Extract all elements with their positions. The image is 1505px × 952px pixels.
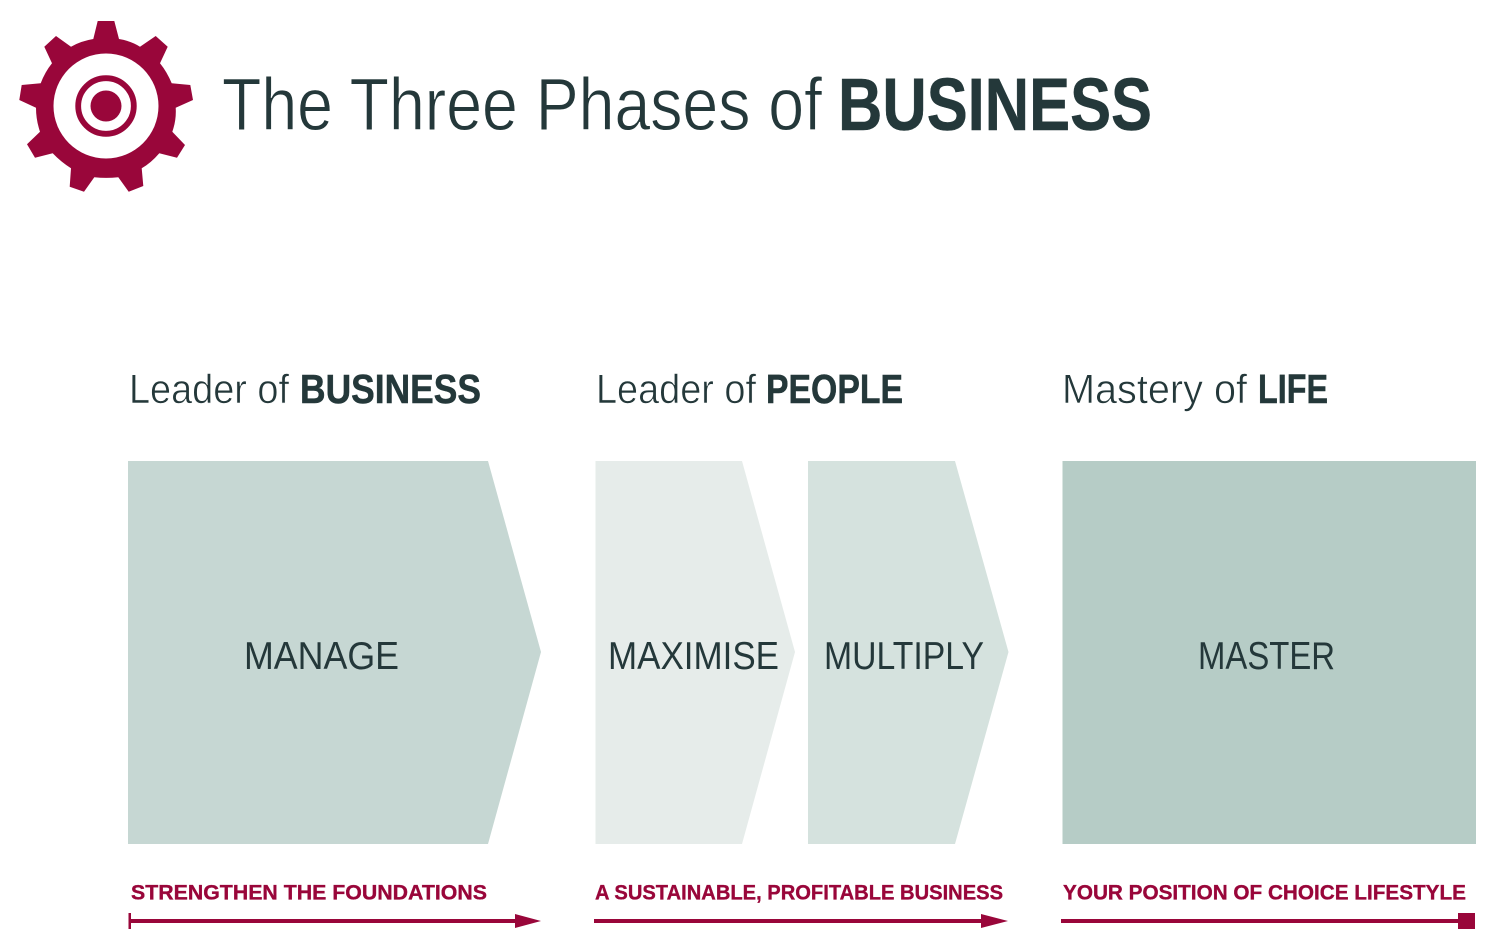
panel: multiply: MULTIPLY: [824, 635, 984, 678]
panel: manage: [128, 461, 541, 844]
caption: a sustainable, profitable business: A SUSTAINABLE, PROFITABLE BUSINESS: [595, 882, 1003, 904]
panel: master: MASTER: [1198, 635, 1335, 678]
heading: Leader of People: Leader of: [596, 366, 757, 412]
arrow: your position of choice lifestyle with end stop: [1061, 913, 1475, 929]
title: BUSINESS: [838, 63, 1152, 146]
heading: Leader of Business: Leader of: [129, 366, 290, 412]
heading: Mastery of Life: LIFE: [1258, 366, 1328, 412]
heading: Mastery of Life: Mastery of: [1062, 366, 1248, 412]
heading: Leader of Business: BUSINESS: [300, 366, 481, 412]
icon: gear with target: [19, 21, 193, 192]
arrow: a sustainable, profitable business: [594, 914, 1008, 928]
panel: multiply: [808, 461, 1008, 844]
heading: Leader of People: PEOPLE: [766, 366, 903, 412]
panel: maximise: [596, 461, 795, 844]
caption: strengthen the foundations: STRENGTHEN THE FOUNDATIONS: [131, 882, 487, 904]
title: The Three Phases of: [222, 63, 822, 146]
arrow: strengthen the foundations: [128, 913, 541, 929]
panel: master: [1062, 461, 1476, 844]
panel: manage: MANAGE: [244, 635, 399, 678]
panel: maximise: MAXIMISE: [608, 635, 779, 678]
caption: your position of choice lifestyle: YOUR POSITION OF CHOICE LIFESTYLE: [1063, 882, 1466, 904]
